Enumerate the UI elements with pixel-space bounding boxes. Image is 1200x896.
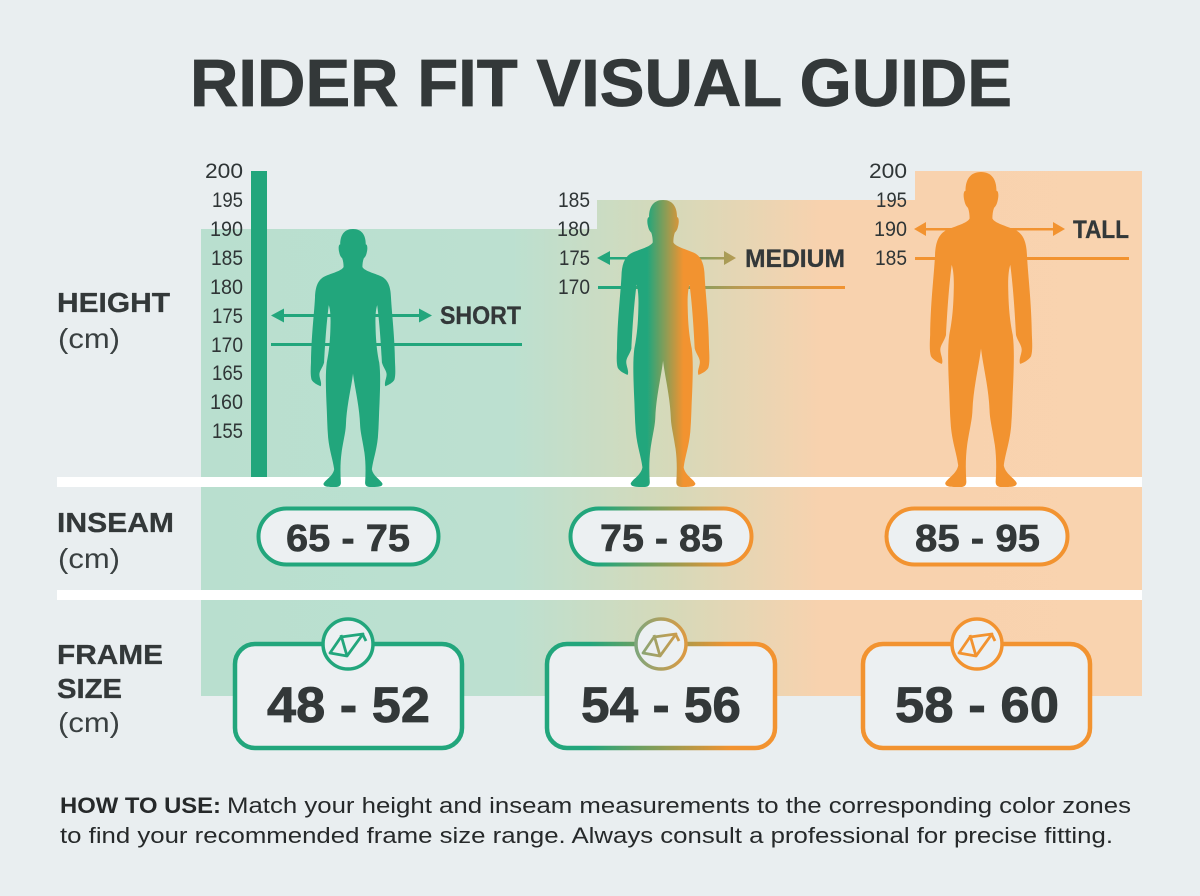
tall height scale: 190 (874, 218, 907, 241)
row label: inseam: (cm) (58, 543, 120, 574)
inseam pill: tall: 85 - 95 (915, 518, 1040, 560)
row label: height: HEIGHT (57, 287, 170, 318)
frame size card: short (235, 619, 462, 748)
tall height scale: 195 (876, 189, 907, 212)
short height scale: 165 (212, 362, 243, 385)
figure: short rider (311, 229, 395, 487)
short height scale: 180 (210, 276, 243, 299)
frame size card: medium: 54 - 56 (581, 677, 741, 733)
short height scale: 190 (210, 218, 243, 241)
short height scale: 155 (212, 420, 243, 443)
inseam pill: medium: 75 - 85 (600, 518, 723, 560)
short height scale (205, 160, 267, 477)
row label: height (57, 287, 170, 354)
tall height scale: 185 (875, 247, 907, 270)
medium height scale: 180 (557, 218, 590, 241)
inseam pill: short: 65 - 75 (286, 518, 410, 560)
row label: inseam: INSEAM (57, 507, 174, 538)
frame size card: tall: 58 - 60 (895, 677, 1059, 733)
row label: inseam (57, 507, 174, 574)
short height scale: 175 (212, 305, 243, 328)
short marker arrow and line (271, 308, 522, 346)
tall height scale: 200 (869, 160, 907, 183)
row label: frame size: FRAME (57, 639, 163, 670)
short height scale: 170 (211, 334, 243, 357)
short height scale: 185 (211, 247, 243, 270)
medium height scale: 175 (559, 247, 590, 270)
medium height scale (557, 189, 590, 299)
short height scale: 195 (212, 189, 243, 212)
how to use note: HOW TO USE: (60, 793, 221, 818)
frame size card: medium (547, 619, 775, 748)
medium height scale: 170 (558, 276, 590, 299)
row label: frame size: SIZE (57, 673, 122, 704)
label: medium: MEDIUM (745, 245, 845, 273)
inseam pill: tall (886, 508, 1068, 564)
tall marker arrow and line (914, 222, 1129, 260)
frame size card: tall (863, 619, 1090, 748)
white divider strips (57, 477, 1142, 600)
title: RIDER FIT VISUAL GUIDE (190, 46, 1012, 121)
inseam pill: short (258, 508, 438, 564)
medium marker arrow and line (597, 251, 845, 289)
icon: bike frame, medium (636, 619, 686, 669)
row label: frame size (57, 639, 163, 738)
how to use note: to find your recommended frame size range. Always consult a professional for precise fitting. (60, 823, 1113, 848)
icon: bike frame, tall (952, 619, 1002, 669)
frame size card: short: 48 - 52 (267, 677, 430, 733)
how to use note: Match your height and inseam measurements to the corresponding color zones (227, 793, 1131, 818)
row label: height: (cm) (58, 323, 120, 354)
label: short: SHORT (440, 302, 521, 330)
inseam pill: medium (570, 508, 752, 564)
icon: bike frame, short (323, 619, 373, 669)
how to use note (60, 793, 1131, 848)
label: tall: TALL (1073, 216, 1129, 244)
short height scale: 160 (210, 391, 243, 414)
short height scale: 200 (205, 160, 243, 183)
figure: tall rider (930, 172, 1032, 487)
colour zones band (201, 171, 1142, 696)
tall height scale (869, 160, 907, 270)
figure: medium rider (617, 200, 709, 487)
medium height scale: 185 (558, 189, 590, 212)
row label: frame size: (cm) (58, 707, 120, 738)
